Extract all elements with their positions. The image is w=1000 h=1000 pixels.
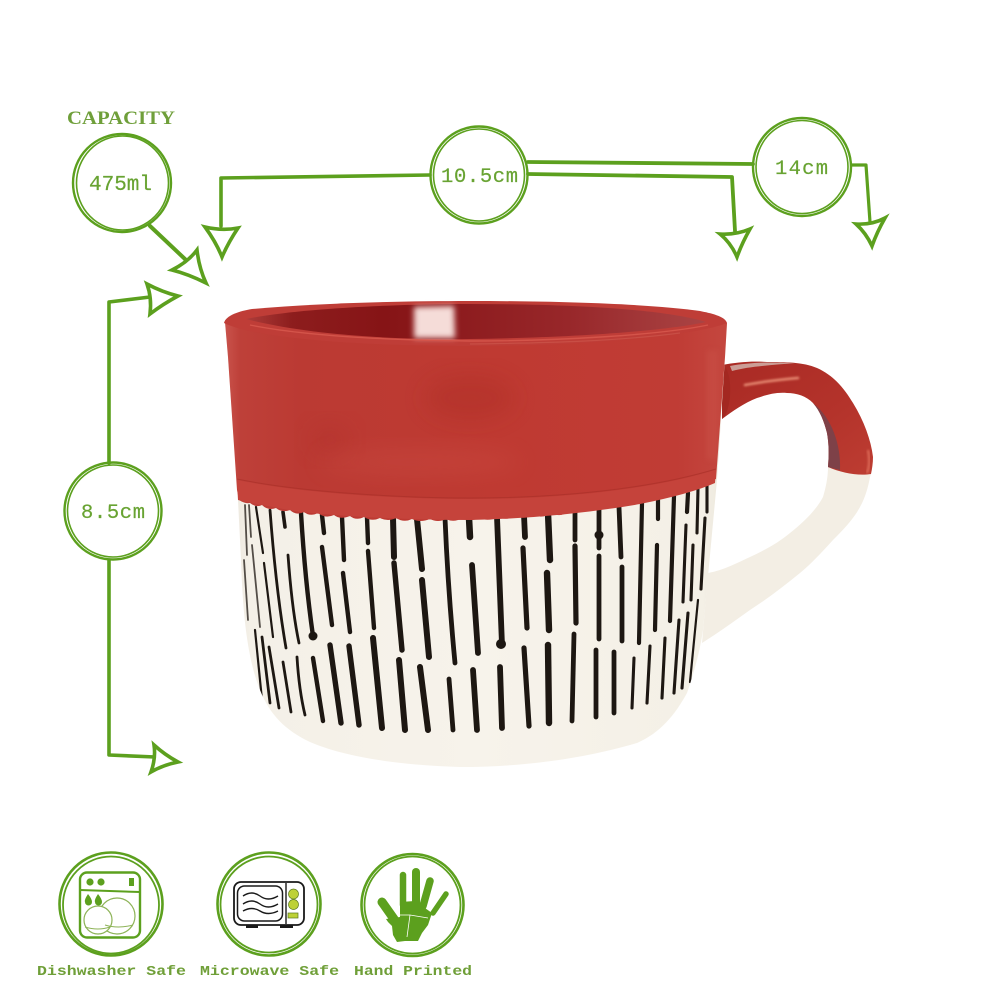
width arrow right [528, 174, 750, 257]
width circle [430, 126, 528, 224]
height arrow bottom [109, 560, 178, 772]
icon: hand printed [362, 854, 464, 956]
label: dishwasher safe: Dishwasher Safe [37, 964, 186, 980]
icon: dishwasher safe [60, 852, 162, 956]
red glaze band [225, 322, 727, 521]
height value: 8.5cm [81, 502, 145, 525]
interior highlight [414, 306, 455, 338]
handle width arrow [852, 165, 885, 246]
connector between circles [528, 162, 753, 164]
handle width circle [753, 118, 851, 216]
height arrow top [109, 284, 178, 463]
capacity value: 475ml [89, 174, 152, 197]
handle width value: 14cm [775, 158, 828, 181]
icon: microwave safe [218, 852, 320, 956]
capacity heading: CAPACITY [67, 109, 176, 129]
mug rim and interior [224, 301, 727, 346]
capacity arrow [150, 226, 206, 283]
label: hand printed: Hand Printed [354, 964, 472, 980]
height circle [64, 462, 162, 560]
mug cream body [225, 322, 727, 767]
black dash pattern [244, 485, 707, 730]
mug handle [702, 362, 873, 643]
mug photo [224, 301, 873, 767]
width value: 10.5cm [441, 166, 518, 189]
label: microwave safe: Microwave Safe [200, 964, 339, 980]
capacity circle [73, 134, 171, 232]
width arrow left [205, 175, 430, 257]
